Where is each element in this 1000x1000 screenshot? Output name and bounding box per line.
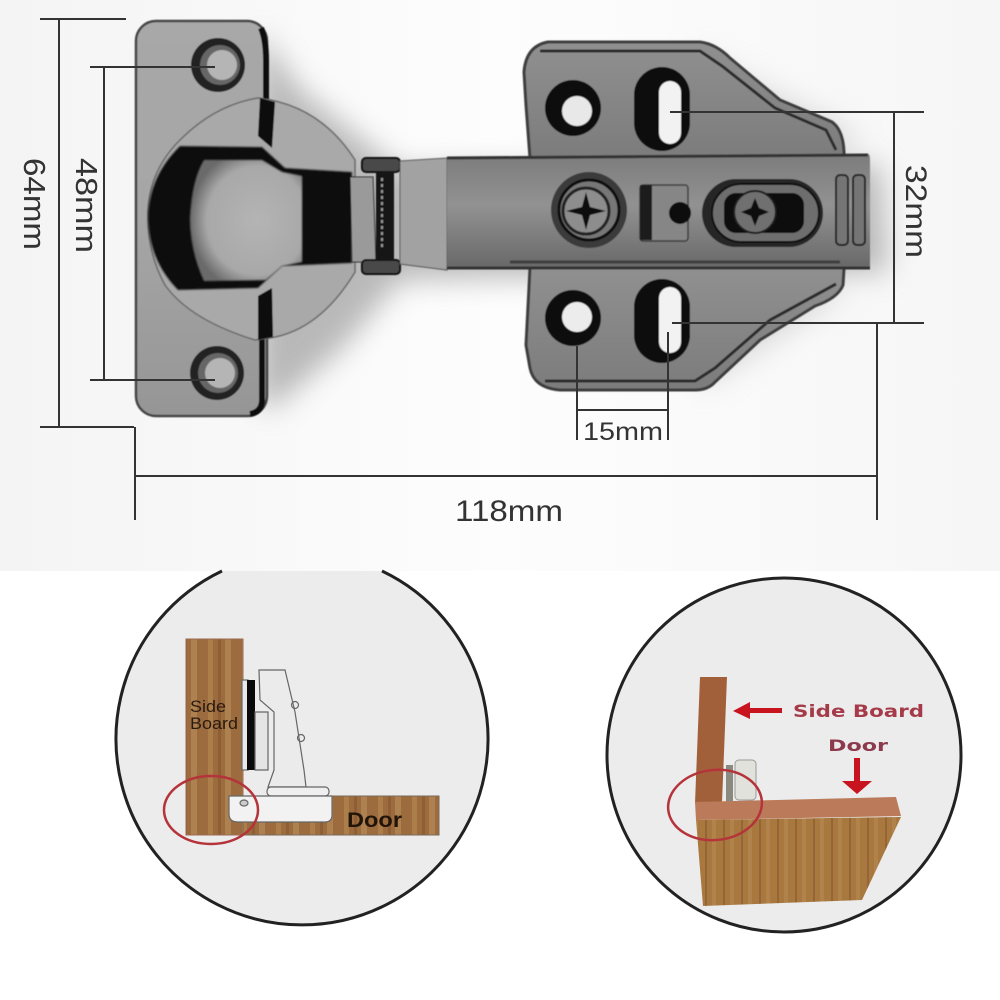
panel: overlay installation circle — [116, 571, 488, 925]
circle background — [116, 571, 488, 925]
cup interior highlight — [190, 160, 302, 281]
plate body — [136, 21, 267, 416]
dimension: 15mm: 15mm — [583, 418, 663, 446]
slot upper — [634, 67, 690, 151]
square window — [640, 185, 691, 241]
side board: Board — [190, 714, 238, 733]
red highlight ellipse — [665, 765, 765, 845]
side board — [695, 677, 727, 803]
circle background — [607, 578, 961, 932]
dimension: 15mm — [577, 332, 668, 446]
black cup recess — [148, 146, 352, 290]
door edge — [695, 797, 901, 820]
hole upper — [545, 80, 601, 136]
dimension: 32mm — [670, 112, 932, 323]
hinge diagram — [229, 670, 332, 822]
soft hinge shadow — [258, 30, 888, 410]
red highlight ellipse — [164, 776, 258, 844]
dimension: 48mm — [69, 67, 215, 380]
door — [243, 796, 439, 835]
screw left — [551, 172, 627, 248]
side board — [186, 639, 243, 835]
door: Door — [347, 809, 402, 832]
cup body — [148, 98, 355, 340]
screw hole top — [191, 38, 245, 92]
label side board: Side Board — [793, 702, 924, 722]
knuckle pin — [362, 158, 400, 274]
dimension: 64mm — [17, 19, 134, 427]
label door: Door — [828, 736, 888, 755]
screw hole bottom — [190, 346, 244, 400]
arm end ribs — [836, 175, 865, 245]
right mounting plate — [524, 42, 844, 158]
knuckle link — [350, 177, 376, 262]
dimension: 64mm: 64mm — [17, 158, 52, 250]
hinge photo — [726, 760, 756, 802]
red arrow to side board — [733, 702, 782, 719]
dimension: 48mm: 48mm — [69, 158, 104, 253]
dimension: 32mm: 32mm — [899, 165, 932, 258]
right mounting plate lower — [526, 268, 844, 390]
hinge cup — [148, 98, 355, 340]
panel: hinge photo background — [0, 0, 1000, 571]
dimension: 118mm — [135, 323, 877, 528]
left mounting plate — [136, 21, 267, 416]
door front — [696, 817, 901, 906]
side board: Side — [190, 697, 226, 716]
slot lower — [634, 279, 690, 363]
hole lower — [545, 290, 601, 346]
dark notches — [258, 98, 275, 340]
arm light section — [400, 158, 447, 270]
main arm — [447, 154, 870, 268]
hinge knuckle and arm — [350, 42, 870, 390]
oval adjusting screw — [702, 179, 823, 247]
red arrow to door — [842, 758, 872, 794]
dimension: 118mm: 118mm — [455, 495, 563, 528]
panel: full overlay circle — [607, 578, 961, 932]
